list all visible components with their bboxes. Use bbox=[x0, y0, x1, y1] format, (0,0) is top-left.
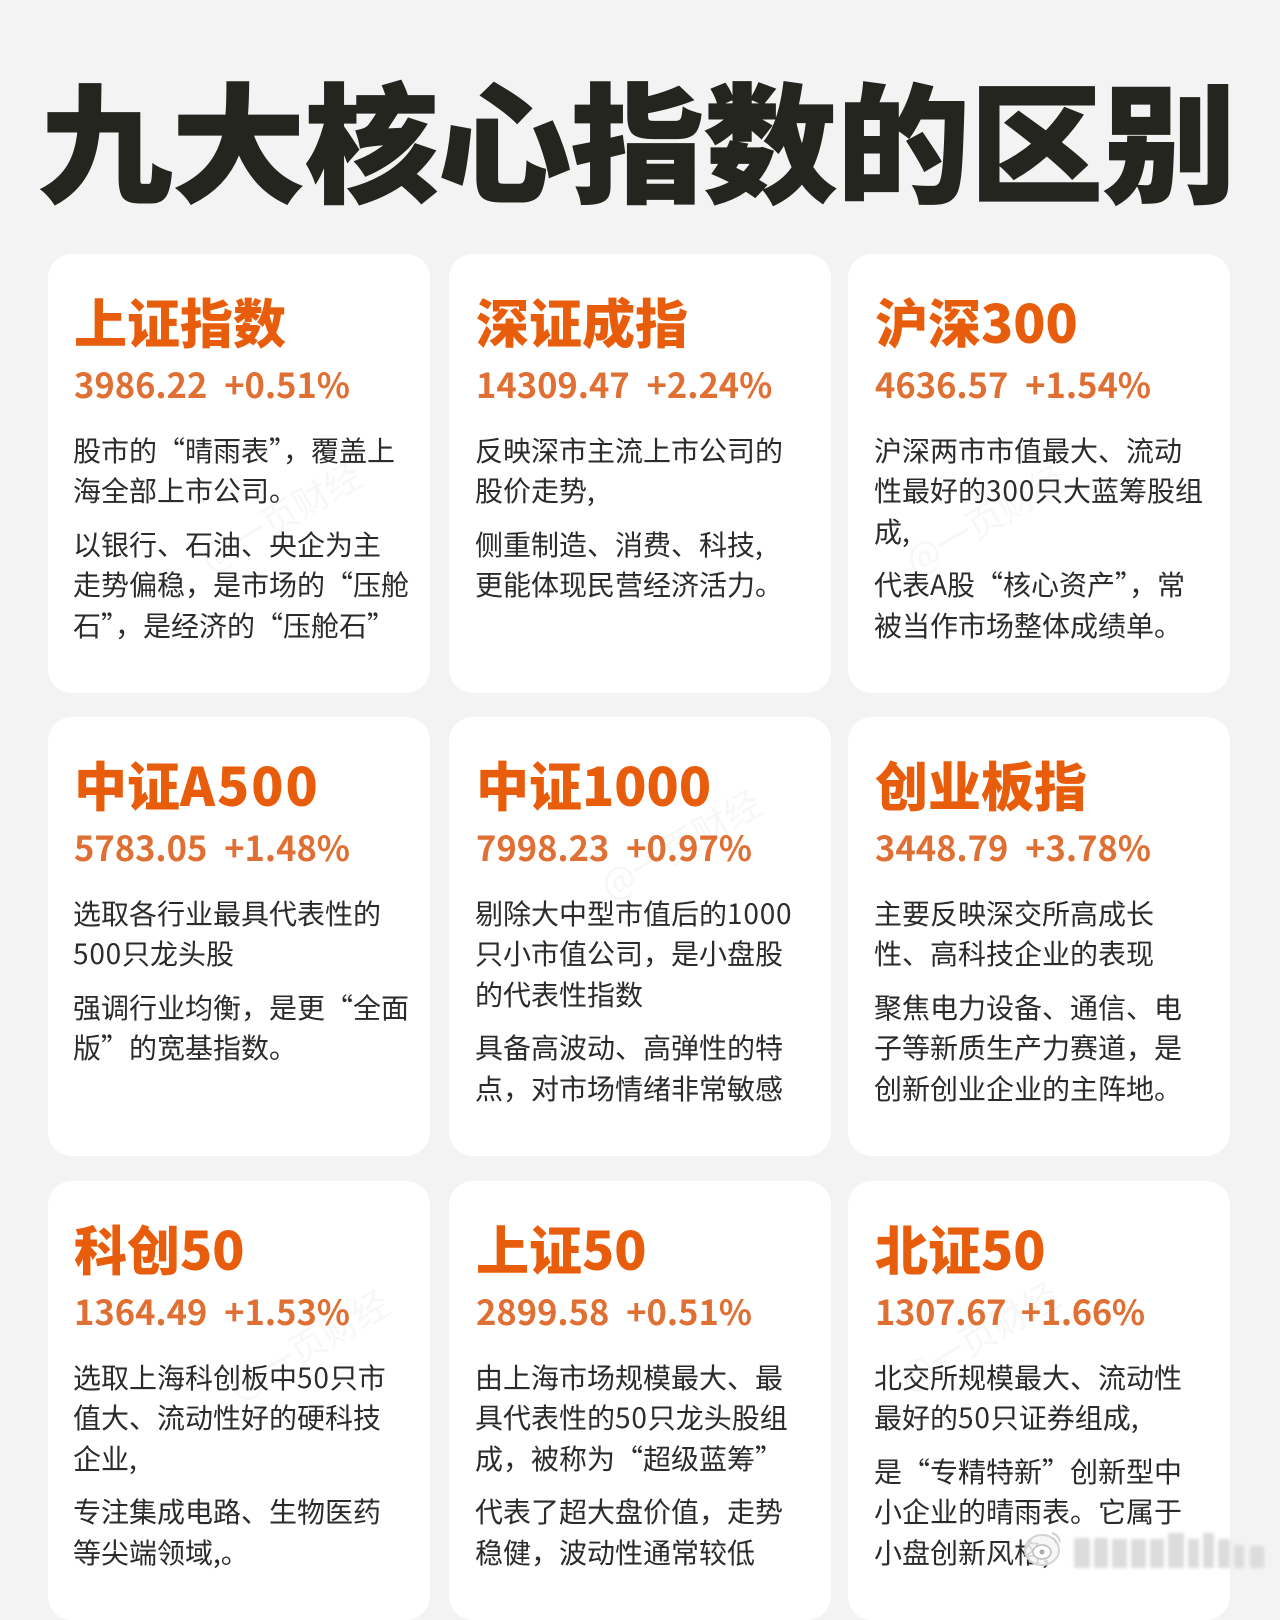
panel: 沪深300: 沪深300 bbox=[875, 283, 1078, 359]
icon: weibo watermark bbox=[1024, 1532, 1264, 1569]
panel: 深证成指: 更能体现民营经济活力。 bbox=[475, 564, 783, 604]
panel: 北证50: @一页财经 bbox=[888, 1268, 1068, 1402]
panel: 中证1000: 中证1000 bbox=[476, 746, 711, 822]
panel: 沪深300: 被当作市场整体成绩单。 bbox=[874, 605, 1182, 645]
panel: 北证50: 小盘创新风格, bbox=[874, 1532, 1050, 1572]
panel: 创业板指 bbox=[848, 717, 1230, 1156]
panel: 中证A500: 5783.05 +1.48% bbox=[74, 821, 350, 871]
panel: 北证50: 北证50 bbox=[875, 1210, 1046, 1286]
panel: 创业板指: 创业板指 bbox=[875, 746, 1087, 822]
panel: 中证1000: 7998.23 +0.97% bbox=[476, 821, 752, 871]
panel: 科创50: 科创50 bbox=[74, 1210, 245, 1286]
panel: 上证50: 代表了超大盘价值，走势 bbox=[475, 1491, 783, 1531]
panel: 深证成指: 反映深市主流上市公司的 bbox=[475, 430, 783, 470]
panel: 沪深300: 沪深两市市值最大、流动 bbox=[874, 430, 1182, 470]
panel: 科创50: 等尖端领域,。 bbox=[73, 1532, 249, 1572]
panel: 上证指数: 上证指数 bbox=[74, 283, 286, 359]
panel: 上证指数 bbox=[48, 254, 430, 693]
panel: 中证1000: 只小市值公司，是小盘股 bbox=[475, 933, 783, 973]
panel: 沪深300: 成, bbox=[874, 511, 910, 551]
panel: 上证指数: 3986.22 +0.51% bbox=[74, 358, 350, 408]
panel: 北证50: 小企业的晴雨表。它属于 bbox=[874, 1491, 1182, 1531]
panel: 上证指数: 以银行、石油、央企为主 bbox=[73, 524, 381, 564]
panel: 沪深300: @一页财经 bbox=[895, 451, 1075, 585]
panel: 中证1000: 具备高波动、高弹性的特 bbox=[475, 1027, 783, 1067]
panel: 上证指数: 石”，是经济的“压舱石” bbox=[73, 605, 395, 645]
panel: 上证50: 2899.58 +0.51% bbox=[476, 1285, 752, 1335]
panel: 上证50 bbox=[449, 1181, 831, 1620]
panel: 中证1000: @一页财经 bbox=[590, 776, 770, 910]
panel: 科创50 bbox=[48, 1181, 430, 1620]
panel: 上证指数: 海全部上市公司。 bbox=[73, 470, 297, 510]
panel: 北证50: 是“专精特新”创新型中 bbox=[874, 1451, 1182, 1491]
panel: 创业板指: 子等新质生产力赛道，是 bbox=[874, 1027, 1182, 1067]
panel: 上证50: 稳健，波动性通常较低 bbox=[475, 1532, 755, 1572]
panel: 北证50 bbox=[848, 1181, 1230, 1620]
panel: 中证1000: 点，对市场情绪非常敏感 bbox=[475, 1068, 783, 1108]
panel: 上证指数: 走势偏稳，是市场的“压舱 bbox=[73, 564, 409, 604]
panel: 北证50: 最好的50只证券组成, bbox=[874, 1397, 1138, 1437]
panel: 科创50: 企业, bbox=[73, 1438, 137, 1478]
panel: 深证成指: 14309.47 +2.24% bbox=[476, 358, 772, 408]
panel: 上证50: 具代表性的50只龙头股组 bbox=[475, 1397, 788, 1437]
panel: 深证成指 bbox=[449, 254, 831, 693]
panel: 沪深300: 性最好的300只大蓝筹股组 bbox=[874, 470, 1203, 510]
panel: 创业板指: 性、高科技企业的表现 bbox=[874, 933, 1154, 973]
panel: 上证指数: @一页财经 bbox=[190, 448, 370, 582]
panel: 中证A500: 中证A500 bbox=[74, 746, 320, 822]
panel: 深证成指: 侧重制造、消费、科技, bbox=[475, 524, 763, 564]
panel: 中证1000 bbox=[449, 717, 831, 1156]
panel: 中证A500 bbox=[48, 717, 430, 1156]
panel: 中证1000: 的代表性指数 bbox=[475, 974, 643, 1014]
title: 九大核心指数的区别 bbox=[39, 44, 1236, 230]
panel: 创业板指: 主要反映深交所高成长 bbox=[874, 893, 1154, 933]
panel: 沪深300 bbox=[848, 254, 1230, 693]
panel: 上证指数: 股市的“晴雨表”，覆盖上 bbox=[73, 430, 395, 470]
panel: 沪深300: 代表A股“核心资产”，常 bbox=[874, 564, 1185, 604]
panel: 深证成指: 深证成指 bbox=[476, 283, 688, 359]
panel: 科创50: 专注集成电路、生物医药 bbox=[73, 1491, 381, 1531]
panel: 上证50: 由上海市场规模最大、最 bbox=[475, 1357, 783, 1397]
panel: 科创50: 1364.49 +1.53% bbox=[74, 1285, 350, 1335]
panel: 创业板指: 3448.79 +3.78% bbox=[875, 821, 1151, 871]
panel: 中证A500: 选取各行业最具代表性的 bbox=[73, 893, 381, 933]
panel: 科创50: 值大、流动性好的硬科技 bbox=[73, 1397, 381, 1437]
panel: 上证50: 成，被称为“超级蓝筹” bbox=[475, 1438, 783, 1478]
panel: 创业板指: 创新创业企业的主阵地。 bbox=[874, 1068, 1182, 1108]
panel: 中证1000: 剔除大中型市值后的1000 bbox=[475, 893, 792, 933]
panel: 深证成指: 股价走势, bbox=[475, 470, 595, 510]
panel: 中证A500: 强调行业均衡，是更“全面 bbox=[73, 987, 409, 1027]
panel: 中证A500: 版”的宽基指数。 bbox=[73, 1027, 297, 1067]
panel: 北证50: 北交所规模最大、流动性 bbox=[874, 1357, 1182, 1397]
panel: 沪深300: 4636.57 +1.54% bbox=[875, 358, 1151, 408]
panel: 中证A500: 500只龙头股 bbox=[73, 933, 234, 973]
panel: 科创50: @一页财经 bbox=[218, 1276, 398, 1410]
panel: 创业板指: 聚焦电力设备、通信、电 bbox=[874, 987, 1182, 1027]
panel: 上证50: 上证50 bbox=[476, 1210, 647, 1286]
panel: 北证50: 1307.67 +1.66% bbox=[875, 1285, 1145, 1335]
panel: 科创50: 选取上海科创板中50只市 bbox=[73, 1357, 386, 1397]
